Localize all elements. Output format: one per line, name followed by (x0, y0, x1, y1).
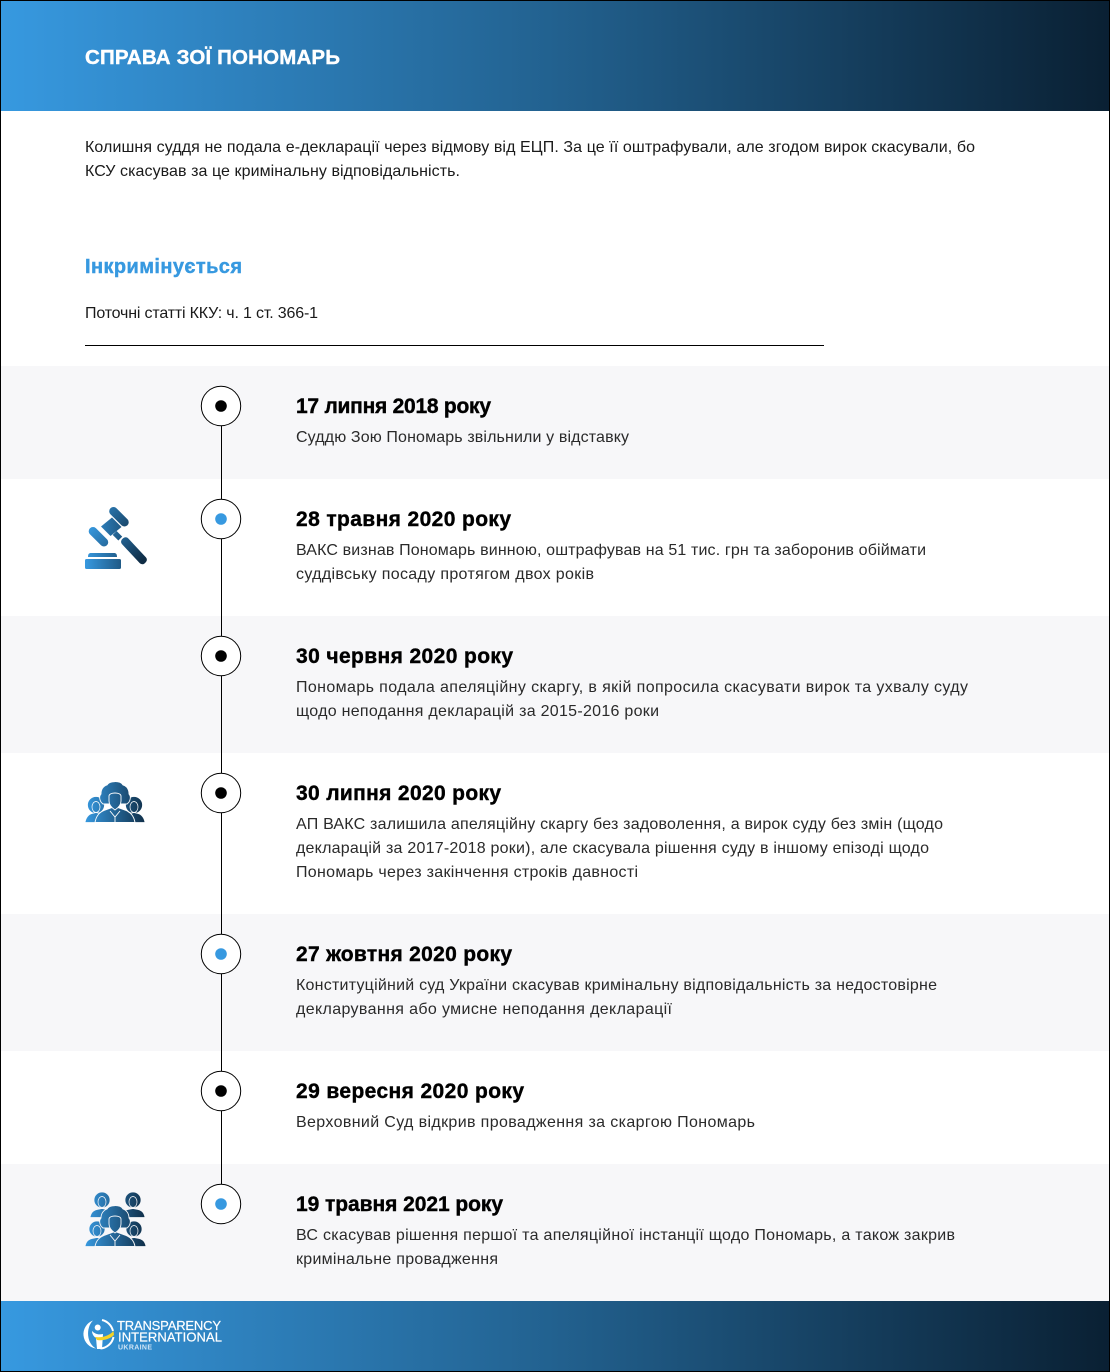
logo: Transparency International Ukraine: UKRAINE (118, 1344, 152, 1352)
event: 28 May 2020: 28 травня 2020 року (296, 508, 511, 531)
footer band (1, 1301, 1109, 1371)
header band (1, 1, 1109, 111)
event: 30 July 2020: Пономарь через закінчення строків давності (296, 864, 638, 881)
event: 28 May 2020: ВАКС визнав Пономарь винною, оштрафував на 51 тис. грн та заборонив обіймати (296, 542, 926, 559)
event: 27 October 2020: декларування або умисне неподання декларації (296, 1001, 673, 1018)
event: 17 July 2018: 17 липня 2018 року (296, 395, 491, 418)
event: 17 July 2018 (296, 395, 629, 446)
icon: three judges (86, 782, 144, 822)
timeline row backgrounds (1, 366, 1109, 1301)
event: 30 July 2020: 30 липня 2020 року (296, 782, 501, 805)
event: 27 October 2020: Конституційний суд України скасував кримінальну відповідальність за недостовірне (296, 977, 937, 994)
event: 30 June 2020 (296, 645, 968, 720)
event: 30 June 2020: щодо неподання декларацій за 2015-2016 роки (296, 703, 659, 720)
logo: Transparency International Ukraine: INTERNATIONAL (118, 1330, 222, 1344)
event: 30 June 2020: 30 червня 2020 року (296, 645, 513, 668)
icon: gavel (85, 505, 148, 569)
icon: five judges (86, 1192, 146, 1246)
event: 30 July 2020 (296, 782, 943, 881)
event: 19 May 2021: ВС скасував рішення першої та апеляційної інстанції щодо Пономарь, а також закрив (296, 1227, 955, 1244)
intro text: Колишня суддя не подала е-декларації через відмову від ЕЦП. За це її оштрафували, але згодом вирок скасували, бо (85, 139, 975, 156)
event: 19 May 2021: кримінальне провадження (296, 1251, 498, 1268)
logo: Transparency International Ukraine: TRANSPARENCY (117, 1318, 221, 1333)
logo: Transparency International Ukraine (83, 1318, 222, 1352)
event: 17 July 2018: Суддю Зою Пономарь звільнили у відставку (296, 429, 629, 446)
marker dots (215, 400, 227, 1210)
intro text: КСУ скасував за це кримінальну відповідальність. (85, 163, 460, 180)
event: 27 October 2020 (296, 943, 937, 1018)
event: 30 June 2020: Пономарь подала апеляційну скаргу, в якій попросила скасувати вирок та ухвалу суду (296, 679, 968, 696)
event: 27 October 2020: 27 жовтня 2020 року (296, 943, 512, 966)
event: 29 September 2020 (296, 1080, 755, 1131)
event: 30 July 2020: декларацій за 2017-2018 роки), але скасувала рішення суду в іншому епізоді щодо (296, 840, 929, 857)
current articles: Поточні статті ККУ: ч. 1 ст. 366-1 (85, 305, 318, 322)
intro text (85, 139, 975, 180)
event: 19 May 2021 (296, 1193, 955, 1268)
event: 29 September 2020: Верховний Суд відкрив провадження за скаргою Пономарь (296, 1114, 755, 1131)
timeline markers (201, 386, 241, 1224)
title: СПРАВА ЗОЇ ПОНОМАРЬ (85, 46, 340, 69)
event: 28 May 2020: суддівську посаду протягом двох років (296, 566, 594, 583)
divider line (85, 345, 824, 346)
event: 19 May 2021: 19 травня 2021 року (296, 1193, 503, 1216)
event: 28 May 2020 (296, 508, 926, 583)
event: 29 September 2020: 29 вересня 2020 року (296, 1080, 524, 1103)
heading: incriminated: Інкримінується (85, 256, 242, 278)
timeline vertical line (221, 425, 222, 1185)
event: 30 July 2020: АП ВАКС залишила апеляційну скаргу без задоволення, а вирок суду без змін (щодо (296, 816, 943, 833)
